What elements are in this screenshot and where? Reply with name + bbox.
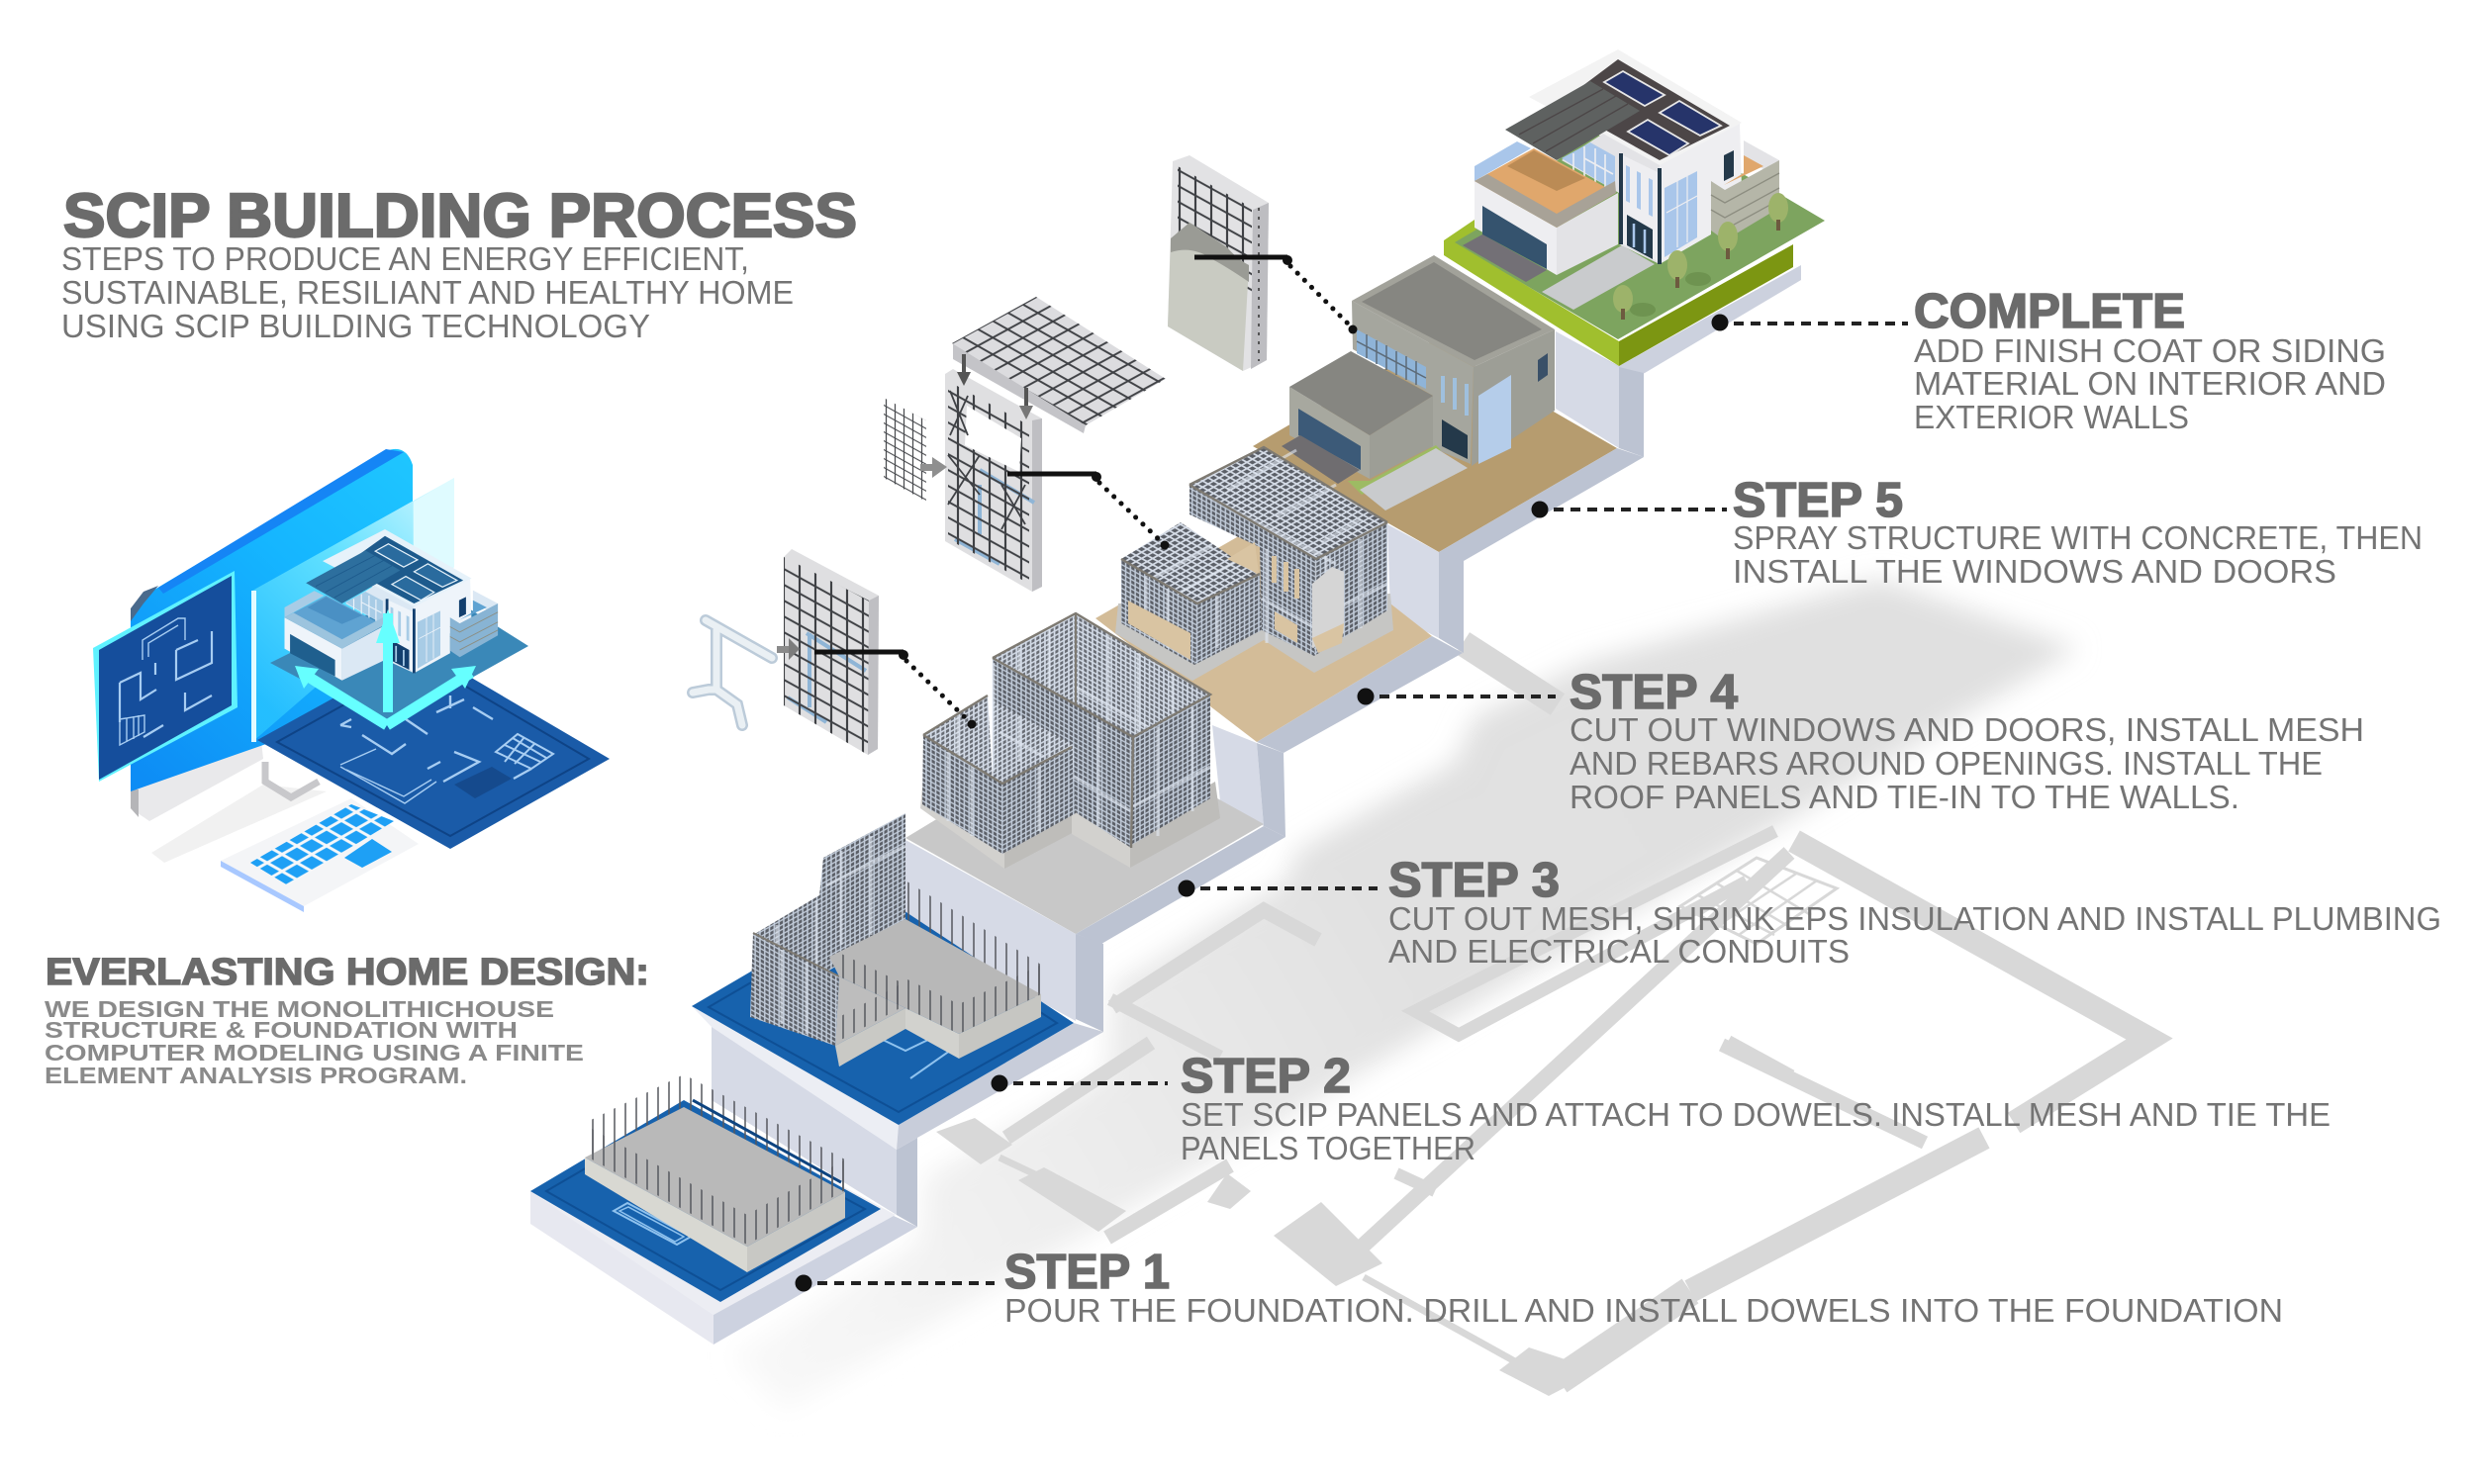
mini house bbox=[284, 529, 498, 681]
label: step 1: POUR THE FOUNDATION. DRILL AND INSTALL DOWELS INTO THE FOUNDATION bbox=[1004, 1293, 2283, 1330]
connector: step 5 bbox=[1532, 501, 1727, 518]
exploded panel: plumbing pipes bbox=[693, 620, 772, 725]
foundation left side bbox=[585, 1158, 747, 1272]
lawn bbox=[1453, 109, 1825, 339]
plate edge bbox=[1076, 826, 1285, 944]
slab sides bbox=[905, 1008, 959, 1059]
label: step 4: ROOF PANELS AND TIE-IN TO THE WALLS. bbox=[1570, 780, 2239, 816]
label: complete: MATERIAL ON INTERIOR AND bbox=[1914, 366, 2386, 403]
concrete plate bbox=[905, 727, 1264, 934]
stair grid on plate bbox=[496, 734, 553, 769]
pointer to step 5 bbox=[1194, 255, 1358, 334]
small block front walls bbox=[922, 735, 1002, 854]
subtitle: SUSTAINABLE, RESILIANT AND HEALTHY HOME bbox=[61, 275, 794, 312]
riser below step 5 bbox=[1387, 524, 1464, 653]
arched opening bbox=[1312, 567, 1344, 648]
base right side bbox=[714, 1216, 917, 1345]
desk shadow bbox=[151, 785, 327, 863]
slab top bbox=[829, 919, 1041, 1034]
title block bbox=[61, 182, 857, 345]
plate edge bbox=[1439, 448, 1644, 569]
mesh bbox=[1178, 166, 1252, 297]
inner and front dowels bbox=[905, 965, 1041, 1034]
connector: step 4 bbox=[1358, 689, 1556, 704]
label: step 2 bbox=[1181, 1050, 2331, 1167]
complete stage: landscaped plot and finished house bbox=[1444, 49, 1825, 384]
heading: EVERLASTING HOME DESIGN: bbox=[46, 952, 649, 993]
arrow: patch mesh into panel bbox=[920, 457, 947, 478]
concrete coat bbox=[1168, 223, 1249, 371]
step 4 plate and meshed house with roof bbox=[1095, 447, 1463, 753]
plot base bbox=[1556, 265, 1801, 384]
ground shadow of the stepped structure bbox=[732, 579, 2078, 1410]
large window bbox=[1478, 375, 1511, 464]
front path bbox=[1542, 245, 1655, 310]
tan plate bbox=[1095, 514, 1432, 742]
house main block bbox=[1352, 301, 1474, 464]
plate plan lines bbox=[340, 696, 531, 782]
label: step 4: AND REBARS AROUND OPENINGS. INSTALL THE bbox=[1570, 746, 2323, 783]
description: WE DESIGN THE MONOLITHICHOUSE bbox=[45, 996, 554, 1022]
monitor chin bbox=[131, 722, 263, 821]
mesh edges bbox=[1121, 447, 1387, 603]
title: SCIP BUILDING PROCESS bbox=[63, 182, 857, 250]
plinths bbox=[920, 787, 1004, 869]
label: step 3: CUT OUT MESH, SHRINK EPS INSULATION AND INSTALL PLUMBING bbox=[1388, 901, 2441, 938]
panel side bbox=[1032, 418, 1042, 592]
conduits bbox=[788, 633, 866, 722]
mesh bbox=[948, 381, 1029, 584]
pointer to step 4 bbox=[1007, 472, 1170, 550]
monitor screen bbox=[131, 449, 413, 791]
base left side bbox=[530, 1191, 714, 1345]
foundation top bbox=[585, 1107, 845, 1247]
connector: complete bbox=[1712, 315, 1908, 330]
mesh bbox=[784, 557, 869, 755]
connector: step 3 bbox=[1178, 881, 1378, 896]
path bbox=[1360, 448, 1468, 510]
step 3 plate and meshed walls bbox=[905, 613, 1285, 944]
front dowels bbox=[585, 1125, 845, 1245]
driveway bbox=[1282, 435, 1360, 484]
low roof studs bbox=[1153, 546, 1237, 594]
patch mesh for opening bbox=[884, 398, 926, 502]
trees bbox=[1613, 193, 1788, 320]
connector: step 2 bbox=[992, 1074, 1168, 1092]
garage block bbox=[1289, 387, 1370, 479]
slit windows bbox=[1441, 376, 1469, 416]
arrow: pipes into panel bbox=[777, 638, 800, 660]
label: step 5 bbox=[1733, 474, 2423, 591]
monitor stand bbox=[265, 762, 319, 797]
driveway bbox=[1463, 234, 1547, 282]
description: ELEMENT ANALYSIS PROGRAM. bbox=[45, 1063, 467, 1088]
description bbox=[45, 996, 584, 1088]
label: step 3: AND ELECTRICAL CONDUITS bbox=[1388, 934, 1850, 971]
label: step 2: PANELS TOGETHER bbox=[1181, 1131, 1475, 1167]
conduit bbox=[955, 470, 1034, 564]
diagonal rebars bbox=[948, 391, 1025, 529]
back dowels bbox=[585, 1074, 845, 1192]
blue plate bbox=[530, 1100, 881, 1302]
label: step 4 bbox=[1570, 666, 2364, 816]
interior studs and corner bbox=[1019, 629, 1173, 762]
label: step 1: STEP 1 bbox=[1004, 1246, 1170, 1299]
panel side bbox=[868, 596, 879, 755]
finished house bbox=[1475, 49, 1779, 275]
panel body bbox=[1168, 155, 1269, 371]
side panel plan lines bbox=[120, 631, 212, 737]
exploded panel: panel with sprayed concrete bbox=[1168, 155, 1269, 371]
label: complete: ADD FINISH COAT OR SIDING bbox=[1914, 333, 2386, 370]
label: step 5: SPRAY STRUCTURE WITH CONCRETE, THEN bbox=[1733, 520, 2423, 557]
label: step 1 bbox=[1004, 1246, 2283, 1330]
subtitle: STEPS TO PRODUCE AN ENERGY EFFICIENT, bbox=[61, 241, 749, 278]
front left tall wall bbox=[993, 658, 1133, 848]
plot green side left bbox=[1444, 220, 1619, 366]
tan plate bbox=[1253, 341, 1617, 552]
step 5 plate and sprayed house bbox=[1253, 255, 1644, 569]
blueprint traces bbox=[614, 1203, 691, 1245]
riser face below plate bbox=[712, 1021, 897, 1215]
everlasting home design block bbox=[45, 952, 649, 1088]
openings bbox=[1128, 542, 1299, 660]
connector: step 1 bbox=[796, 1274, 995, 1292]
mesh wall front bbox=[750, 933, 839, 1046]
roof studs bbox=[1209, 450, 1361, 564]
panel body bbox=[945, 369, 1042, 592]
interior of tall walls bbox=[993, 613, 1076, 811]
panel body bbox=[784, 549, 879, 755]
subtitle: USING SCIP BUILDING TECHNOLOGY bbox=[61, 309, 650, 345]
foundation right side bbox=[747, 1192, 845, 1272]
small window bbox=[1538, 353, 1548, 382]
tall block mesh bbox=[1189, 485, 1316, 656]
upper windows bbox=[1357, 329, 1426, 389]
plinth bbox=[1115, 594, 1393, 681]
lawn strip bbox=[1348, 445, 1441, 495]
blueprint floor plate bbox=[257, 649, 610, 849]
label: step 3 bbox=[1388, 854, 2441, 971]
front studs bbox=[948, 707, 1210, 836]
step 2 plate, slab and first panels bbox=[692, 813, 1103, 1227]
label: step 3: STEP 3 bbox=[1388, 854, 1560, 907]
description: STRUCTURE & FOUNDATION WITH bbox=[45, 1017, 518, 1043]
computer modeling illustration bbox=[93, 449, 610, 912]
axis arrows bbox=[295, 609, 476, 725]
panel side bbox=[1251, 203, 1269, 369]
wall edges bbox=[923, 613, 1210, 848]
arrows: roof panel down to wall bbox=[957, 354, 1033, 419]
front right tall wall bbox=[1130, 695, 1210, 846]
keyboard bbox=[221, 798, 419, 906]
base top bbox=[530, 1100, 896, 1315]
label: complete: EXTERIOR WALLS bbox=[1914, 400, 2189, 436]
mesh wall back bbox=[753, 813, 905, 1014]
blue plate bbox=[692, 895, 1074, 1125]
entrance door bbox=[1442, 419, 1468, 459]
monitor top edge bbox=[158, 449, 404, 594]
label: step 4: STEP 4 bbox=[1570, 666, 1738, 719]
step 1 base with foundation and dowels bbox=[530, 1074, 917, 1345]
exploded panel: wall with window opening bbox=[945, 369, 1042, 592]
plate lip bbox=[692, 1006, 899, 1150]
riser below step 4 bbox=[1212, 725, 1285, 837]
exploded panel: wall panel with mesh and conduits bbox=[784, 549, 879, 755]
edge of plate bbox=[1257, 636, 1463, 753]
description: COMPUTER MODELING USING A FINITE bbox=[45, 1040, 584, 1066]
ghosted floor plan on the ground bbox=[936, 643, 2149, 1396]
riser under complete stage bbox=[1556, 331, 1644, 457]
back dowels on slab bbox=[905, 881, 1041, 994]
label: step 2: SET SCIP PANELS AND ATTACH TO DOWELS. INSTALL MESH AND TIE THE bbox=[1181, 1097, 2331, 1134]
label: step 2: STEP 2 bbox=[1181, 1050, 1351, 1103]
blueprint side panel bbox=[93, 571, 238, 782]
glass panel bbox=[252, 478, 454, 742]
small block interior bbox=[923, 696, 993, 811]
plot under mini house bbox=[270, 584, 528, 725]
label: step 4: CUT OUT WINDOWS AND DOORS, INSTALL MESH bbox=[1570, 712, 2364, 749]
dark room on plate bbox=[454, 767, 512, 798]
label: complete bbox=[1914, 285, 2386, 436]
label: step 5: INSTALL THE WINDOWS AND DOORS bbox=[1733, 554, 2336, 591]
plot green side right bbox=[1619, 244, 1793, 366]
garage door bbox=[1298, 409, 1361, 470]
blueprint traces bbox=[839, 1039, 950, 1078]
exploded panel: roof panel bbox=[952, 297, 1166, 433]
pointer to step 3 bbox=[814, 650, 976, 728]
wall studs bbox=[1146, 539, 1387, 648]
label: step 5: STEP 5 bbox=[1733, 474, 1903, 527]
label: complete: COMPLETE bbox=[1914, 285, 2185, 338]
low block mesh bbox=[1121, 522, 1257, 603]
subtitle bbox=[61, 241, 794, 345]
riser below step 3 bbox=[905, 840, 1103, 1032]
